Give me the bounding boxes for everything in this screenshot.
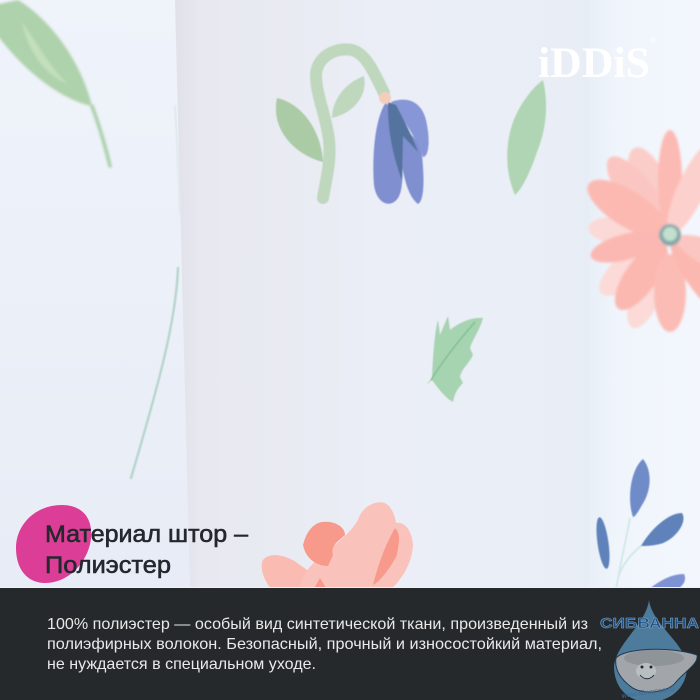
divider (0, 587, 700, 588)
water drop (614, 600, 687, 700)
heading: Материал штор – (45, 521, 249, 548)
description text: полиэфирных волокон. Безопасный, прочный и износостойкий материал, (47, 636, 602, 653)
sibvanna url: www.sibvanna.ru (620, 686, 675, 700)
long thin stem (131, 105, 180, 478)
bell left leaf (276, 98, 323, 162)
description text (47, 616, 602, 673)
bell joint (379, 92, 391, 104)
bell petals (373, 102, 403, 204)
bell dark centre (388, 102, 418, 180)
flower: coral bottom (262, 502, 413, 595)
flower: blue branch bottom right (594, 459, 685, 592)
flower: pink daisy (579, 130, 700, 333)
bell stem (316, 49, 384, 198)
leaf: upper right (507, 80, 546, 195)
description text: не нуждается в специальном уходе. (47, 656, 316, 673)
heading: Полиэстер (45, 552, 171, 579)
branch left leaf (596, 516, 610, 570)
branch right leaf (641, 513, 683, 546)
description panel (0, 588, 700, 700)
branch lower leaf (651, 574, 686, 587)
branch top leaf (630, 459, 650, 517)
leaf: top left with stem (0, 0, 110, 166)
heading (45, 521, 249, 579)
daisy centre (659, 224, 681, 246)
bell right leaf (332, 76, 365, 118)
sibvanna name: СИБВАННА (600, 615, 699, 632)
accent blob: pink (16, 505, 91, 583)
description text: 100% полиэстер — особый вид синтетической ткани, произведенный из (47, 616, 588, 633)
leaf: small jagged (426, 316, 483, 402)
bathtub character (616, 649, 697, 692)
logo: iddis: ® (650, 36, 656, 45)
logo: iddis: iDDiS (538, 40, 650, 87)
flower: drooping blue bell (276, 49, 429, 204)
watermark logo: sibvanna (600, 600, 699, 700)
